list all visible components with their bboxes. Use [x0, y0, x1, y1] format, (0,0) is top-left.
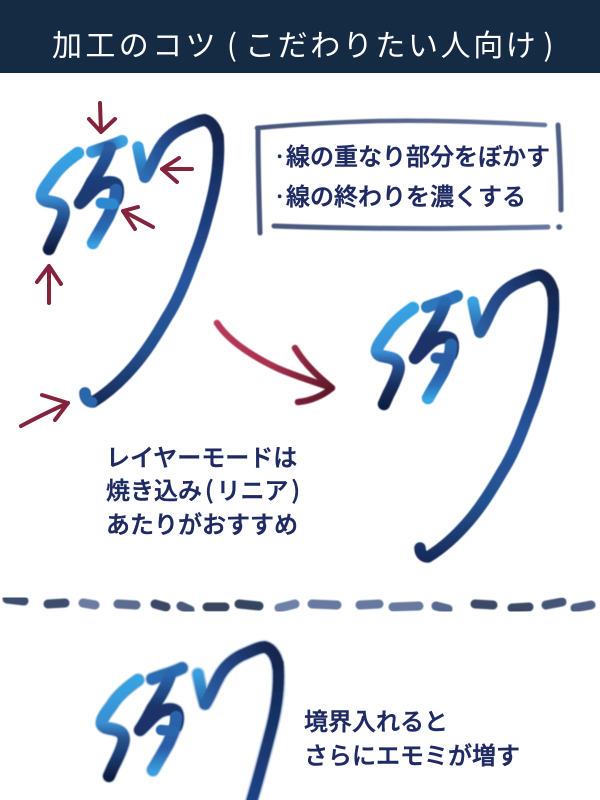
- brush stroke glyph: before processing: [42, 120, 219, 402]
- layer mode note: あたりがおすすめ: [106, 504, 298, 540]
- header banner with title: [0, 0, 600, 73]
- layer mode note: 焼き込み(リニア): [106, 471, 300, 506]
- brush stroke glyph: processed result: [377, 275, 554, 557]
- brush stroke glyph: with outline, main strokes: [102, 647, 279, 800]
- tips box hand-drawn frame: [257, 121, 561, 233]
- layer mode note: レイヤーモードは: [106, 438, 297, 472]
- arrow: bottom left stroke: [37, 266, 61, 303]
- arrow: top: [89, 103, 115, 132]
- tips box text: 線の重なり部分をぼかす: [286, 137, 550, 172]
- text: ·: [273, 177, 286, 212]
- arrow: middle: [123, 207, 153, 229]
- border note: 境界入れると: [304, 702, 448, 737]
- dashed brush divider: [7, 599, 591, 610]
- header banner with title: (: [227, 21, 237, 65]
- large arrow to processed result: [217, 323, 332, 402]
- tips box text: 線の終わりを濃くする: [286, 177, 526, 212]
- red arrows pointing at stroke ends: [21, 103, 192, 426]
- brush stroke glyph: with outline, pale border underlay: [102, 647, 279, 800]
- border note: [304, 702, 520, 771]
- text: ·: [273, 137, 286, 172]
- tips box text: [273, 137, 550, 212]
- header banner with title: 加工のコツ こだわりたい人向け: [52, 21, 538, 65]
- arrow: stroke tail: [21, 395, 68, 426]
- layer mode note: [106, 438, 300, 540]
- arrow: right: [162, 158, 192, 182]
- border note: さらにエモミが増す: [304, 736, 520, 771]
- header banner with title: ): [543, 21, 553, 65]
